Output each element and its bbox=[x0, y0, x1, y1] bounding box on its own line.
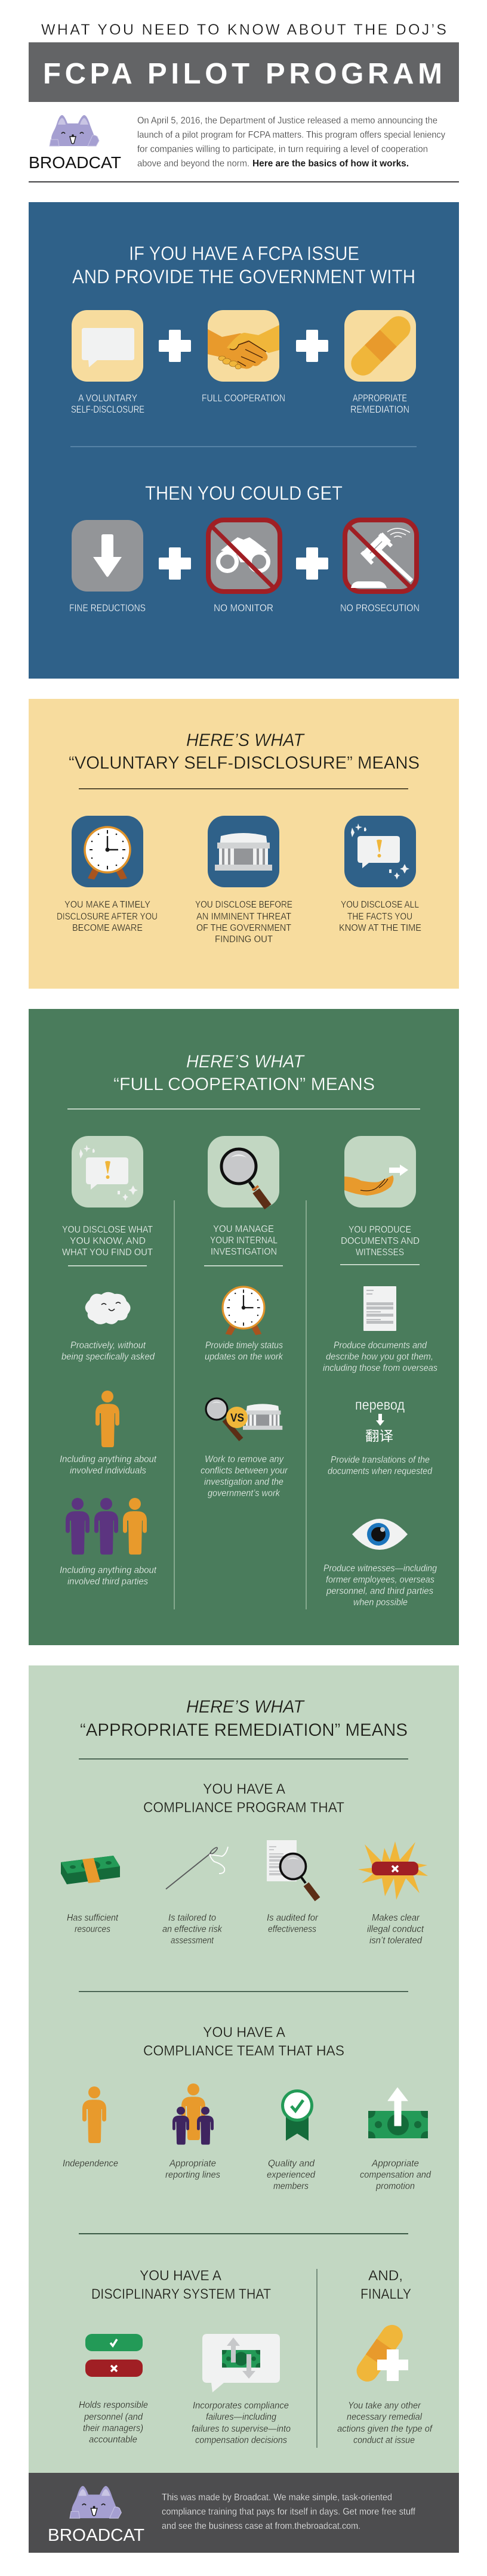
text: reporting lines bbox=[165, 2159, 220, 2180]
label: no prosecution: NO PROSECUTION bbox=[340, 602, 420, 614]
text: disclose before threat: FINDING OUT bbox=[215, 934, 273, 945]
text: audited: effectiveness bbox=[268, 1924, 316, 1934]
text: timely disclosure: BECOME AWARE bbox=[72, 923, 143, 933]
footer text: This was made by Broadcat. We make simple, task-oriented bbox=[162, 2493, 392, 2503]
heading: compliance team: COMPLIANCE TEAM THAT HAS bbox=[143, 2043, 344, 2059]
heading: and, finally: FINALLY bbox=[360, 2286, 411, 2302]
text: remove conflicts: investigation and the bbox=[204, 1477, 283, 1487]
heading: compliance program bbox=[143, 1781, 344, 1816]
text: remove conflicts: conflicts between your bbox=[201, 1466, 288, 1476]
intro paragraph bbox=[137, 116, 445, 169]
text: other remedial actions: You take any other bbox=[348, 2401, 421, 2411]
logo: Broadcat bbox=[29, 115, 121, 172]
text: other remedial actions: necessary remedial bbox=[347, 2412, 423, 2422]
text: witnesses bbox=[323, 1563, 437, 1608]
heading: if you have a FCPA issue bbox=[72, 243, 415, 287]
text: you disclose what you know: YOU DISCLOSE WHAT bbox=[62, 1225, 153, 1235]
heading: disciplinary system: YOU HAVE A bbox=[140, 2268, 221, 2284]
text: incorporates failures: compensation decisions bbox=[195, 2435, 287, 2445]
icon: no monitor binoculars bbox=[208, 520, 280, 592]
icon: smiling cloud bbox=[85, 1292, 131, 1324]
title banner bbox=[29, 42, 459, 102]
text: proactively: being specifically asked bbox=[61, 1352, 155, 1362]
label: appropriate remediation: APPROPRIATE bbox=[353, 392, 407, 404]
heading: if you have a FCPA issue: AND PROVIDE THE GOVERNMENT WITH bbox=[72, 266, 415, 287]
logo: Broadcat footer bbox=[48, 2486, 144, 2545]
text: remove conflicts: government’s work bbox=[208, 1488, 281, 1498]
text: disclose all facts: YOU DISCLOSE ALL bbox=[341, 900, 419, 910]
heading: appropriate remediation means: “APPROPRIATE REMEDIATION” MEANS bbox=[80, 1720, 408, 1740]
panel: the deal bbox=[29, 202, 459, 679]
text: proactively: Proactively, without bbox=[70, 1340, 146, 1351]
icon: three people bbox=[66, 1498, 147, 1555]
text: you produce documents and witnesses bbox=[341, 1225, 420, 1258]
text: timely disclosure: YOU MAKE A TIMELY bbox=[64, 900, 150, 910]
text: sufficient resources bbox=[67, 1913, 119, 1934]
icon: translation: 翻译 bbox=[365, 1428, 393, 1444]
footer bbox=[29, 2473, 459, 2553]
heading: compliance program: COMPLIANCE PROGRAM THAT bbox=[143, 1800, 344, 1816]
text: timely disclosure bbox=[57, 900, 158, 933]
text: remove conflicts bbox=[201, 1454, 288, 1498]
text: disclose before threat: AN IMMINENT THREAT bbox=[196, 912, 291, 922]
heading: voluntary self-disclosure means: “VOLUNTARY SELF-DISCLOSURE” MEANS bbox=[69, 753, 420, 773]
text: individuals bbox=[60, 1454, 157, 1476]
icon: plus bbox=[159, 547, 191, 580]
text: compensation: promotion bbox=[375, 2181, 415, 2191]
text: you manage your investigation: YOUR INTERNAL bbox=[210, 1236, 278, 1246]
heading: compliance team: YOU HAVE A bbox=[203, 2024, 285, 2041]
text: holds responsible bbox=[79, 2400, 148, 2445]
text: disclose before threat: YOU DISCLOSE BEFORE bbox=[195, 900, 292, 910]
heading: disciplinary system bbox=[91, 2268, 271, 2302]
text: status updates: updates on the work bbox=[205, 1352, 283, 1362]
text: witnesses: former employees, overseas bbox=[326, 1575, 434, 1585]
icon: bill with up arrow bbox=[368, 2088, 428, 2138]
text: tailored: assessment bbox=[171, 1936, 214, 1946]
heading: and, finally: AND, bbox=[368, 2268, 403, 2284]
text: holds responsible: Holds responsible bbox=[79, 2400, 148, 2410]
icon: magnifying glass bbox=[208, 1136, 279, 1208]
text: witnesses: personnel, and third parties bbox=[326, 1586, 433, 1596]
text: holds responsible: accountable bbox=[89, 2435, 137, 2445]
icon: translation bbox=[355, 1397, 405, 1444]
text: audited bbox=[267, 1913, 319, 1934]
panel: voluntary self-disclosure bbox=[29, 699, 459, 989]
text: produce documents: including those from overseas bbox=[323, 1363, 437, 1373]
intro paragraph: Here are the basics of how it works. bbox=[252, 159, 409, 169]
text: timely disclosure: DISCLOSURE AFTER YOU bbox=[57, 912, 158, 922]
text: produce documents: describe how you got them, bbox=[326, 1352, 433, 1362]
text: quality members: Quality and bbox=[268, 2159, 315, 2169]
icon: plus bbox=[296, 547, 328, 580]
text: third parties bbox=[60, 1565, 157, 1587]
panel: full cooperation bbox=[29, 1009, 459, 1645]
label: no monitor: NO MONITOR bbox=[214, 602, 273, 614]
text: illegal conduct: illegal conduct bbox=[367, 1924, 424, 1934]
heading: voluntary self-disclosure means bbox=[69, 730, 420, 773]
logo: Broadcat: BROADCAT bbox=[29, 153, 121, 172]
text: status updates: Provide timely status bbox=[205, 1340, 283, 1351]
text: tailored bbox=[162, 1913, 223, 1946]
text: witnesses: Produce witnesses—including bbox=[323, 1563, 437, 1574]
text: illegal conduct: Makes clear bbox=[372, 1913, 420, 1923]
text: disclose before threat bbox=[195, 900, 292, 945]
icon: alert speech bubble bbox=[344, 816, 416, 887]
heading: full cooperation means: “FULL COOPERATION” MEANS bbox=[113, 1075, 375, 1094]
label: fine reductions: FINE REDUCTIONS bbox=[69, 602, 146, 614]
icon: plus bbox=[159, 330, 191, 362]
icon: stack of money bbox=[61, 1856, 120, 1884]
icon: no prosecution gavel bbox=[345, 520, 417, 592]
text: incorporates failures: failures—including bbox=[206, 2412, 276, 2422]
text: disclose all facts: KNOW AT THE TIME bbox=[339, 923, 421, 933]
text: you disclose what you know bbox=[62, 1225, 153, 1258]
icon: eye bbox=[352, 1519, 408, 1550]
icon: reporting lines bbox=[172, 2083, 214, 2145]
icon: investigation versus government bbox=[206, 1398, 282, 1439]
text: sufficient resources: resources bbox=[75, 1924, 110, 1934]
footer text: and see the business case at from.thebroadcat.com. bbox=[162, 2521, 360, 2531]
label: appropriate remediation bbox=[350, 392, 409, 415]
heading: compliance team bbox=[143, 2024, 344, 2059]
intro paragraph: launch of a pilot program for FCPA matters. This program offers special leniency bbox=[137, 130, 445, 140]
text: independence: Independence bbox=[63, 2159, 118, 2169]
panel: appropriate remediation bbox=[29, 1665, 459, 2473]
text: third parties: involved third parties bbox=[67, 1577, 148, 1587]
text: illegal conduct bbox=[367, 1913, 424, 1946]
footer text: compliance training that pays for itself in days. Get more free stuff bbox=[162, 2507, 416, 2517]
text: you produce documents and witnesses: WITNESSES bbox=[356, 1247, 404, 1258]
icon: red x alert with burst bbox=[358, 1841, 428, 1900]
text: quality members: members bbox=[273, 2181, 309, 2191]
icon: clock bbox=[72, 816, 143, 887]
text: witnesses: when possible bbox=[353, 1597, 408, 1608]
text: tailored: Is tailored to bbox=[168, 1913, 216, 1923]
heading: if you have a FCPA issue: IF YOU HAVE A FCPA ISSUE bbox=[129, 243, 359, 264]
icon: alert speech bubble bbox=[72, 1136, 143, 1208]
text: incorporates failures: failures to supervise—into bbox=[192, 2424, 291, 2434]
text: reporting lines: reporting lines bbox=[165, 2170, 220, 2180]
heading: and, finally bbox=[360, 2268, 411, 2302]
text: other remedial actions: conduct at issue bbox=[353, 2435, 415, 2445]
heading: disciplinary system: DISCIPLINARY SYSTEM THAT bbox=[91, 2286, 271, 2302]
text: translations bbox=[328, 1455, 433, 1476]
text: you manage your investigation bbox=[210, 1224, 278, 1257]
text: proactively bbox=[61, 1340, 155, 1362]
icon: translation: перевод bbox=[355, 1397, 405, 1413]
label: voluntary self-disclosure: A VOLUNTARY bbox=[78, 392, 137, 404]
text: reporting lines: Appropriate bbox=[169, 2159, 216, 2169]
icon: award ribbon bbox=[281, 2089, 313, 2141]
text: other remedial actions bbox=[337, 2401, 433, 2445]
text: compensation: compensation and bbox=[360, 2170, 431, 2180]
text: compensation bbox=[360, 2159, 431, 2191]
text: incorporates failures bbox=[192, 2401, 291, 2445]
text: third parties: Including anything about bbox=[60, 1565, 157, 1575]
text: translations: documents when requested bbox=[328, 1466, 433, 1476]
text: translations: Provide translations of the bbox=[331, 1455, 430, 1465]
title banner: FCPA PILOT PROGRAM bbox=[43, 58, 442, 90]
icon: individual person bbox=[95, 1391, 119, 1447]
text: produce documents: Produce documents and bbox=[334, 1340, 427, 1351]
icon: clock bbox=[223, 1287, 264, 1335]
text: compensation: Appropriate bbox=[371, 2159, 419, 2169]
text: you disclose what you know: WHAT YOU FIND OUT bbox=[62, 1247, 153, 1258]
footer text bbox=[162, 2493, 416, 2531]
icon: fine reductions arrow bbox=[72, 520, 143, 592]
label: voluntary self-disclosure bbox=[71, 392, 144, 415]
heading: voluntary self-disclosure means: HERE’S WHAT bbox=[186, 730, 306, 750]
heading: full cooperation means bbox=[113, 1052, 375, 1094]
heading: then you could get: THEN YOU COULD GET bbox=[145, 482, 343, 504]
label: appropriate remediation: REMEDIATION bbox=[350, 404, 409, 415]
text: status updates bbox=[205, 1340, 283, 1362]
intro paragraph: above and beyond the norm. bbox=[137, 159, 249, 169]
icon: check and x pills bbox=[85, 2334, 143, 2377]
text: quality members bbox=[267, 2159, 316, 2191]
icon: document bbox=[363, 1286, 396, 1331]
text: individuals: involved individuals bbox=[70, 1466, 146, 1476]
label: voluntary self-disclosure: SELF-DISCLOSURE bbox=[71, 404, 144, 415]
text: tailored: an effective risk bbox=[162, 1924, 223, 1934]
text: disclose all facts bbox=[339, 900, 421, 933]
icon: compensation speech bubble bbox=[202, 2334, 280, 2392]
logo: Broadcat footer: BROADCAT bbox=[48, 2526, 144, 2545]
text: sufficient resources: Has sufficient bbox=[67, 1913, 119, 1923]
icon: plus bbox=[296, 330, 328, 362]
label: full cooperation: FULL COOPERATION bbox=[202, 392, 285, 404]
text: other remedial actions: actions given the type of bbox=[337, 2424, 433, 2434]
heading: appropriate remediation means bbox=[80, 1697, 408, 1740]
icon: needle and thread bbox=[166, 1847, 228, 1889]
icon: person bbox=[82, 2086, 106, 2143]
text: audited: Is audited for bbox=[267, 1913, 319, 1923]
text: incorporates failures: Incorporates compliance bbox=[193, 2401, 289, 2411]
text: holds responsible: personnel (and bbox=[84, 2412, 143, 2422]
text: remove conflicts: Work to remove any bbox=[205, 1454, 284, 1465]
text: you disclose what you know: YOU KNOW, AND bbox=[70, 1236, 146, 1246]
text: individuals: Including anything about bbox=[60, 1454, 157, 1465]
text: you manage your investigation: INVESTIGATION bbox=[211, 1247, 277, 1257]
text: disclose all facts: THE FACTS YOU bbox=[347, 912, 412, 922]
heading: appropriate remediation means: HERE’S WHAT bbox=[186, 1697, 306, 1717]
intro paragraph: for companies willing to participate, in turn requiring a level of cooperation bbox=[137, 144, 428, 154]
text: produce documents bbox=[323, 1340, 437, 1373]
intro paragraph: On April 5, 2016, the Department of Justice released a memo announcing the bbox=[137, 116, 437, 126]
text: you manage your investigation: YOU MANAGE bbox=[213, 1224, 274, 1234]
text: you produce documents and witnesses: DOCUMENTS AND bbox=[341, 1236, 420, 1246]
kicker heading: WHAT YOU NEED TO KNOW ABOUT THE DOJ’S bbox=[41, 21, 446, 38]
heading: full cooperation means: HERE’S WHAT bbox=[186, 1052, 306, 1072]
icon: bandage bbox=[344, 310, 416, 382]
text: illegal conduct: isn’t tolerated bbox=[369, 1936, 423, 1946]
text: quality members: experienced bbox=[267, 2170, 316, 2180]
icon: bandage with plus bbox=[352, 2321, 408, 2386]
icon: hand with arrow bbox=[344, 1136, 416, 1208]
text: you produce documents and witnesses: YOU PRODUCE bbox=[349, 1225, 411, 1235]
icon: speech bubble bbox=[72, 310, 143, 382]
icon: investigation versus government: VS bbox=[230, 1412, 244, 1425]
icon: handshake bbox=[208, 310, 279, 382]
heading: compliance program: YOU HAVE A bbox=[203, 1781, 285, 1797]
icon: courthouse bbox=[208, 816, 279, 887]
text: holds responsible: their managers) bbox=[83, 2423, 143, 2433]
text: disclose before threat: OF THE GOVERNMENT bbox=[196, 923, 291, 933]
icon: document under magnifier bbox=[267, 1840, 318, 1899]
